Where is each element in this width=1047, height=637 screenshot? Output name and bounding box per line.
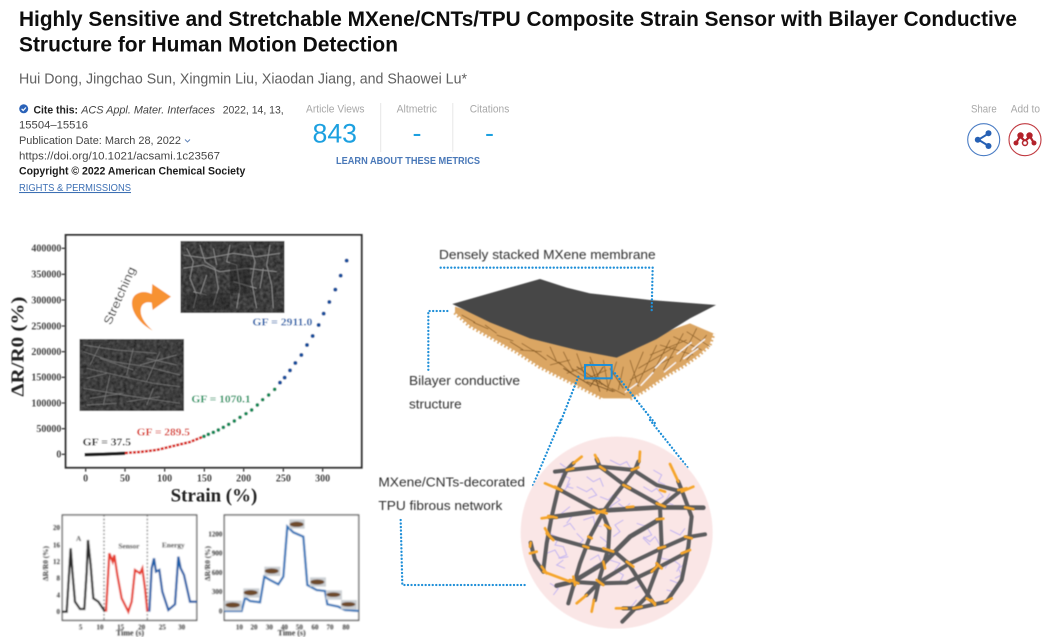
article metrics: LEARN ABOUT THESE METRICS [336,155,480,167]
y axis tick labels: 200000 [31,347,61,358]
chart: motion sensing words: ΔR/R0 (%) [41,546,50,581]
gauge factor labels: GF = 2911.0 [252,317,313,329]
pink magnified circle [521,437,713,629]
share and add-to buttons: Share [971,104,997,116]
icon: share [968,124,1000,156]
membrane label: Densely stacked MXene membrane [439,248,656,262]
x axis title: Strain (%) [171,485,257,506]
title: Highly Sensitive and Stretchable MXene/CNTs/TPU Composite Strain Sensor with Bilayer Conductive [19,8,1017,31]
title: Structure for Human Motion Detection [19,34,398,57]
gauge factor labels: GF = 289.5 [137,426,191,438]
article metrics: - [485,118,494,148]
chart: motion sensing words: 5 [79,623,83,631]
citation block [19,104,284,194]
icon: orange stretching arrow [132,284,171,331]
chart: motion sensing words [41,515,197,637]
y axis tick labels: 350000 [31,270,61,281]
bilayer structure diagram [409,248,716,423]
chart: eye motion: 70 [327,623,334,631]
article metrics: - [412,118,422,148]
authors: Hui Dong, Jingchao Sun, Xingmin Liu, Xiaodan Jiang, and Shaowei Lu* [19,71,467,87]
x axis tick labels: 250 [276,474,291,485]
chart: eye motion [203,515,359,637]
x axis tick labels: 0 [83,474,88,485]
orange CNT junctions [530,452,693,612]
SEM image: stretched [181,241,284,313]
icon: mendeley [1009,124,1041,156]
citation block: 15504–15516 [19,120,88,132]
chart: eye motion: 50 [296,623,303,631]
chart frame [66,235,362,468]
bilayer label: Bilayer conductive [409,374,520,388]
chart: eye motion: 60 [312,623,319,631]
x axis tick labels: 300 [315,474,330,485]
dotted leader lines [428,268,655,423]
chart: motion sensing words: 0 [56,608,60,616]
stretching label: Stretching [101,265,139,327]
y axis tick labels: 250000 [31,321,61,332]
chart: motion sensing words: 20 [53,524,61,532]
black MXene membrane [452,279,716,358]
SEM image: unstretched [80,339,184,411]
chart: motion sensing words: A [76,534,82,543]
gauge factor labels [83,317,313,449]
chart: motion sensing words: 8 [56,575,60,583]
citation block: 2022, 14, 13, [223,104,284,116]
chart: eye motion: 300 [212,588,223,596]
share and add-to buttons: Add to [1011,104,1040,116]
x axis tick labels: 150 [197,474,212,485]
y axis title: ΔR/R0 (%) [7,297,28,397]
share and add-to buttons [968,104,1041,156]
title [19,8,1017,57]
x axis tick labels: 200 [236,474,251,485]
green data points [202,387,276,438]
article metrics: Citations [470,104,510,116]
bilayer label [409,374,520,411]
citation block: Publication Date: March 28, 2022 [19,135,181,147]
main strain chart [7,235,362,506]
chart: eye motion: 1200 [208,531,223,539]
article metrics: 843 [312,119,357,149]
y axis tick labels: 100000 [31,398,61,409]
chart: motion sensing words: 25 [159,623,166,631]
purple CNT wisps [547,460,687,610]
citation block: https://doi.org/10.1021/acsami.1c23567 [19,150,220,162]
y axis tick labels: 50000 [36,424,61,435]
icon: check badge [19,104,28,113]
citation block: ACS Appl. Mater. Interfaces [80,104,215,116]
chart: eye motion: 30 [266,623,273,631]
x axis tick labels: 50 [120,474,130,485]
axis ticks [62,248,323,472]
black data segment [85,453,125,455]
gauge factor labels: GF = 37.5 [83,437,132,449]
zoom selection box [585,365,612,378]
fibrous network detail [378,420,713,629]
chart: motion sensing words: 10 [97,623,104,631]
y axis tick labels [31,244,61,461]
chart: eye motion: ΔR/R0 (%) [203,546,212,581]
y axis tick labels: 400000 [31,244,61,255]
citation block: RIGHTS & PERMISSIONS [19,182,131,194]
chart: motion sensing words: Sensor [118,541,140,550]
chart: motion sensing words: 15 [117,623,125,631]
x axis tick labels: 100 [157,474,172,485]
chart: motion sensing words: 20 [138,623,146,631]
y axis tick labels: 300000 [31,295,61,306]
article metrics [306,103,510,167]
chart: eye motion: 0 [219,607,223,615]
blue data points [278,259,349,385]
article metrics: Article Views [306,104,365,116]
chart: motion sensing words: 16 [53,541,61,549]
chart: eye motion: 600 [212,569,223,577]
network label [378,476,525,513]
small charts [41,515,359,637]
gray fibers [531,459,705,622]
thumbnails: eye photos [224,519,357,611]
red data segment [125,436,204,453]
gauge factor labels: GF = 1070.1 [191,393,251,405]
bilayer label: structure [409,397,462,411]
network label: MXene/CNTs-decorated [378,476,525,490]
chart: motion sensing words: Energy [162,541,185,550]
citation block: Copyright © 2022 American Chemical Society [19,166,246,178]
network label: TPU fibrous network [378,499,503,513]
chart: eye motion: 80 [343,623,350,631]
orange fibrous TPU layer [455,307,713,398]
x axis tick labels [83,474,330,485]
article metrics: Altmetric [397,104,437,116]
y axis tick labels: 150000 [31,373,61,384]
chart: motion sensing words: 30 [178,623,186,631]
dotted leader lines [401,420,688,585]
y axis tick labels: 0 [56,450,61,461]
chart: eye motion: 900 [212,550,223,558]
article header [19,8,1041,194]
chart: motion sensing words: 12 [53,558,61,566]
chart: motion sensing words: 4 [56,591,60,599]
chart: eye motion: 10 [236,623,243,631]
chart: eye motion: 20 [251,623,258,631]
chart: eye motion: 40 [281,623,288,631]
citation block: Cite this: [34,104,78,116]
